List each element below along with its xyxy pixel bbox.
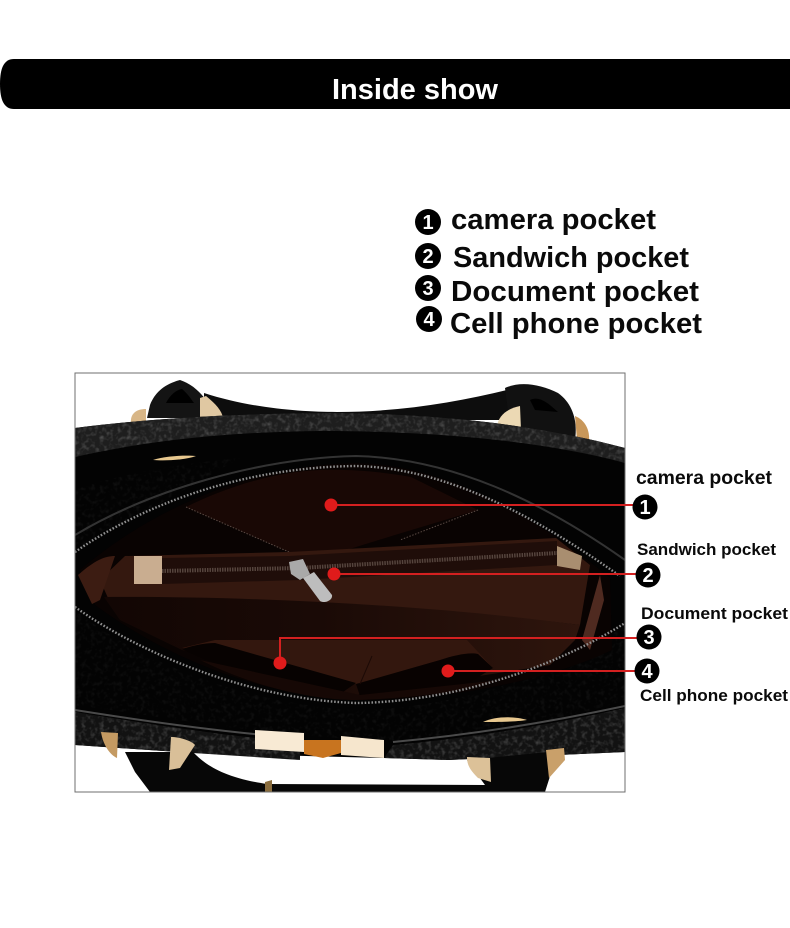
zipper pull <box>289 559 332 602</box>
legend item 2: 2 <box>422 246 434 268</box>
legend item 3: Document pocket <box>451 276 699 308</box>
title: Inside show <box>332 74 498 106</box>
sandwich pocket panel <box>100 538 590 625</box>
callout 4: cell phone pocket <box>442 658 788 705</box>
textured leather rims <box>75 410 625 770</box>
legend item 1: 1 <box>422 212 434 234</box>
bottom handles <box>101 732 565 792</box>
callout 2: sandwich pocket <box>328 540 776 588</box>
lower pocket shadow <box>200 660 500 700</box>
header banner <box>0 59 790 109</box>
callout 1: camera pocket: camera pocket <box>636 468 773 489</box>
photo frame <box>75 373 625 792</box>
lower interior lining <box>104 597 580 695</box>
callout 2: sandwich pocket: Sandwich pocket <box>637 540 776 559</box>
inner gold highlights <box>153 456 527 722</box>
callout 3: document pocket <box>274 604 788 670</box>
handbag photo panel <box>75 373 625 792</box>
legend item 4: Cell phone pocket <box>450 308 702 340</box>
interior lining <box>532 654 603 678</box>
callout 3: document pocket: 3 <box>643 627 655 649</box>
top handles <box>131 380 589 441</box>
callout 4: cell phone pocket: Cell phone pocket <box>640 686 788 705</box>
clasp <box>255 730 384 758</box>
bag body <box>75 413 625 760</box>
sandwich zipper <box>162 541 557 584</box>
callout 1: camera pocket: 1 <box>639 497 651 519</box>
suede tabs <box>134 546 582 584</box>
legend list <box>415 204 702 340</box>
legend item 2: Sandwich pocket <box>453 242 689 274</box>
callout 3: document pocket: Document pocket <box>641 604 788 623</box>
legend item 1: camera pocket <box>451 204 656 236</box>
legend item 4: 4 <box>423 309 435 331</box>
zipper piping <box>75 456 625 560</box>
camera pocket lining <box>186 470 478 552</box>
callout 2: sandwich pocket: 2 <box>642 565 654 587</box>
document pocket flap <box>182 640 493 696</box>
zippers <box>75 466 625 703</box>
legend item 3: 3 <box>422 278 434 300</box>
callout 1: camera pocket <box>324 468 773 520</box>
callout 4: cell phone pocket: 4 <box>641 661 653 683</box>
